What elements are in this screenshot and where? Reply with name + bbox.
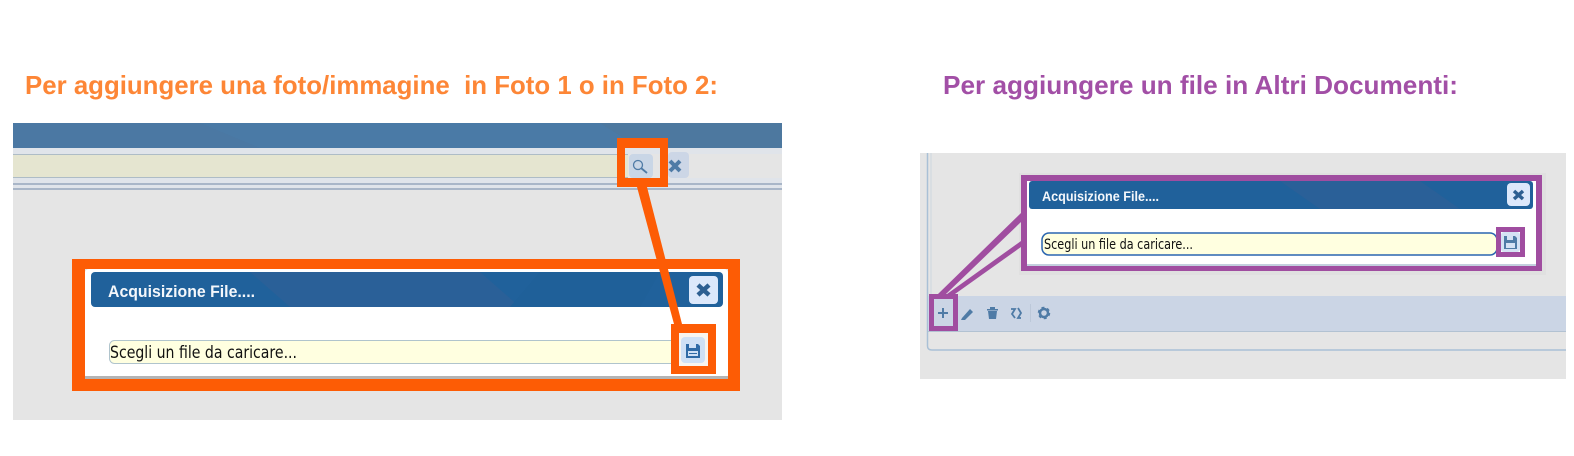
icon: save button (679, 333, 708, 366)
dialog title: Acquisizione File.... (108, 282, 255, 301)
panel rounded border (928, 153, 1566, 350)
dialog: file acquisition (85, 269, 728, 379)
highlight: save button frame (1496, 227, 1525, 257)
toolbar (928, 296, 1566, 332)
icon: delete (987, 307, 998, 319)
icon: dialog close button (689, 276, 718, 304)
highlight: save button frame (671, 324, 716, 374)
panel: documents upload screenshot (920, 153, 1566, 379)
file input: Scegli un file da caricare... (110, 343, 297, 363)
icon: refresh (1011, 308, 1021, 318)
dialog: file acquisition (1027, 181, 1536, 266)
arrow: connector from search to save (637, 187, 682, 324)
dialog title: Acquisizione File.... (1042, 188, 1159, 204)
panel: photo upload screenshot (13, 123, 782, 420)
dialog title bar (1029, 181, 1533, 209)
photo input field (13, 155, 628, 177)
heading: photo instructions: Per aggiungere una foto/immagine in Foto 1 o in Foto 2: (25, 70, 718, 100)
dialog shadow (1019, 173, 1546, 275)
file input (1042, 233, 1497, 255)
icon: settings (1038, 308, 1050, 318)
icon: save button (1501, 232, 1520, 252)
highlight: add button frame (929, 294, 958, 331)
icon: add (938, 308, 948, 318)
arrow: connector from add to dialog, lower (947, 241, 1021, 294)
file input (110, 340, 682, 364)
icon: clear button (668, 152, 689, 178)
dialog title bar (91, 272, 723, 307)
highlight: dialog frame (1021, 175, 1542, 271)
file input: Scegli un file da caricare... (1044, 237, 1193, 253)
highlight: dialog frame (72, 259, 740, 391)
icon: edit (961, 309, 973, 320)
icon: dialog close button (1507, 183, 1530, 206)
arrow: connector from add to dialog, upper (938, 213, 1021, 294)
heading: documents instructions: Per aggiungere un file in Altri Documenti: (943, 70, 1458, 100)
highlight: search button frame (617, 138, 668, 187)
page header band (13, 123, 782, 148)
icon: search button (629, 154, 653, 178)
